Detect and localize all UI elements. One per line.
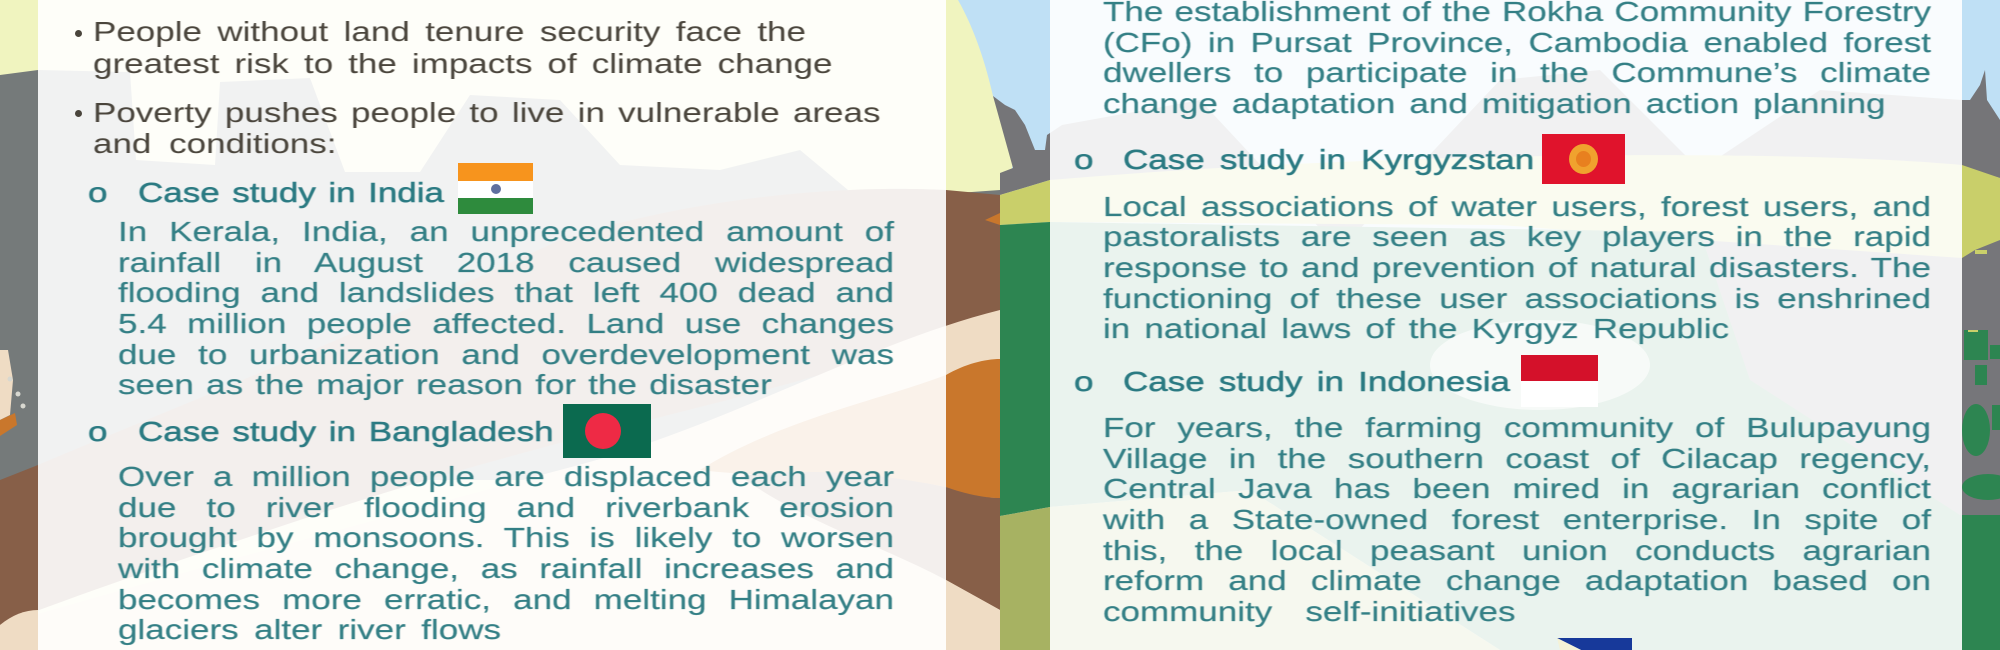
- paragraph: Kyrgyzstan case study: Local associations of water users, forest users, and: [1103, 190, 1931, 222]
- left cream hillside: [0, 0, 1013, 650]
- foreground olive hill: [1000, 490, 1500, 650]
- forest green field: [1000, 222, 2000, 650]
- heading: case study Kyrgyzstan: Case study in Kyrgyzstan: [1123, 144, 1534, 175]
- lower brown band: [740, 472, 1000, 610]
- bullet dot: land tenure: [75, 30, 82, 37]
- icon: flag of Bangladesh: [563, 404, 651, 458]
- heading: case study Indonesia: o: [1074, 366, 1093, 397]
- icon: flag of the Philippines, cropped at the bottom edge: [1557, 638, 1632, 650]
- paragraph: Bangladesh case study: [117, 461, 894, 646]
- sky: [950, 0, 2000, 650]
- paragraph: Kyrgyzstan case study: pastoralists are seen as key players in the rapid: [1103, 221, 1931, 252]
- paragraph: Cambodia case study: dwellers to participate in the Commune’s climate: [1103, 57, 1931, 88]
- heading: case study Kyrgyzstan: o: [1074, 144, 1093, 175]
- paragraph: India case study: rainfall in August 2018 caused widespread: [118, 247, 894, 278]
- left edge tan figure: [0, 350, 13, 420]
- heading: case study India: Case study in India: [138, 177, 444, 208]
- paragraph: Indonesia case study: Village in the southern coast of Cilacap regency,: [1103, 443, 1931, 474]
- text: poverty bullet: Poverty pushes people to live in vulnerable areas: [92, 97, 880, 128]
- paragraph: Bangladesh case study: brought by monsoons. This is likely to worsen: [118, 522, 894, 553]
- left edge tan hill foot: [0, 610, 38, 650]
- paragraph: Kyrgyzstan case study: response to and prevention of natural disasters. The: [1103, 252, 1931, 283]
- left brown earth band: [0, 189, 1000, 625]
- left grey mountain range: [0, 70, 1000, 480]
- icon: flag of Kyrgyzstan: [1542, 134, 1625, 184]
- paragraph: Indonesia case study: Central Java has been mired in agrarian conflict: [1103, 473, 1931, 504]
- paragraph: India case study: flooding and landslides that left 400 dead and: [118, 277, 894, 308]
- paragraph: Cambodia case study: [1102, 0, 1932, 120]
- text: poverty bullet: [92, 97, 880, 159]
- paragraph: Indonesia case study: with a State-owned forest enterprise. In spite of: [1103, 504, 1931, 535]
- paragraph: India case study: seen as the major reason for the disaster: [118, 369, 772, 400]
- icon: flag of Indonesia: [1521, 355, 1598, 407]
- paragraph: Kyrgyzstan case study: [1102, 190, 1931, 344]
- heading: case study Bangladesh: o: [88, 416, 107, 447]
- paragraph: Bangladesh case study: with climate change, as rainfall increases and: [118, 553, 894, 584]
- right panel: [1050, 0, 1962, 650]
- paragraph: Cambodia case study: (CFo) in Pursat Province, Cambodia enabled forest: [1103, 27, 1931, 58]
- left edge orange accent: [0, 413, 17, 436]
- heading: case study Bangladesh: Case study in Bangladesh: [138, 416, 554, 447]
- heading: case study India: o: [88, 177, 107, 208]
- heading: case study Indonesia: Case study in Indonesia: [1123, 366, 1510, 397]
- paragraph: Kyrgyzstan case study: in national laws of the Kyrgyz Republic: [1103, 313, 1729, 344]
- text: poverty bullet: and conditions:: [92, 128, 336, 159]
- white dots: [8, 376, 26, 408]
- pale moon blob: [1430, 320, 1650, 410]
- paragraph: Indonesia case study: this, the local peasant union conducts agrarian: [1103, 535, 1931, 566]
- small orange wedge: [985, 213, 1000, 225]
- left tan ridge: [0, 310, 1000, 650]
- paragraph: India case study: [118, 216, 895, 400]
- central grey mountain: [993, 70, 2000, 250]
- bullet dot: poverty: [75, 110, 82, 117]
- paragraph: India case study: due to urbanization and overdevelopment was: [118, 339, 894, 370]
- text: land tenure bullet: People without land tenure security face the: [92, 16, 805, 47]
- paragraph: India case study: 5.4 million people affected. Land use changes: [118, 308, 894, 339]
- paragraph: Indonesia case study: community self-initiatives: [1103, 596, 1516, 627]
- paragraph: Bangladesh case study: Over a million people are displaced each year: [118, 461, 894, 492]
- right forest patches: [1962, 330, 2000, 500]
- paragraph: Bangladesh case study: due to river flooding and riverbank erosion: [118, 492, 894, 523]
- paragraph: India case study: In Kerala, India, an unprecedented amount of: [118, 216, 894, 247]
- yellow-green hill: [1000, 155, 2000, 260]
- paragraph: Bangladesh case study: glaciers alter river flows: [118, 614, 501, 645]
- paragraph: Kyrgyzstan case study: functioning of these user associations is enshrined: [1103, 283, 1931, 314]
- paragraph: Cambodia case study: change adaptation and mitigation action planning: [1103, 88, 1886, 119]
- left panel: [38, 0, 946, 650]
- orange hill: [700, 359, 1000, 498]
- text: land tenure bullet: greatest risk to the impacts of climate change: [92, 48, 832, 79]
- paragraph: Indonesia case study: For years, the farming community of Bulupayung: [1103, 412, 1931, 443]
- text: land tenure bullet: [92, 16, 832, 79]
- paragraph: Indonesia case study: [1102, 412, 1932, 628]
- scattered yellow-green tree marks: [1968, 250, 1987, 332]
- right textured grey hillside: [1700, 240, 2000, 515]
- icon: flag of India: [458, 163, 533, 214]
- paragraph: Bangladesh case study: becomes more erratic, and melting Himalayan: [118, 584, 894, 615]
- lower-left tan foot: [946, 580, 1000, 650]
- paragraph: Indonesia case study: reform and climate change adaptation based on: [1103, 565, 1931, 596]
